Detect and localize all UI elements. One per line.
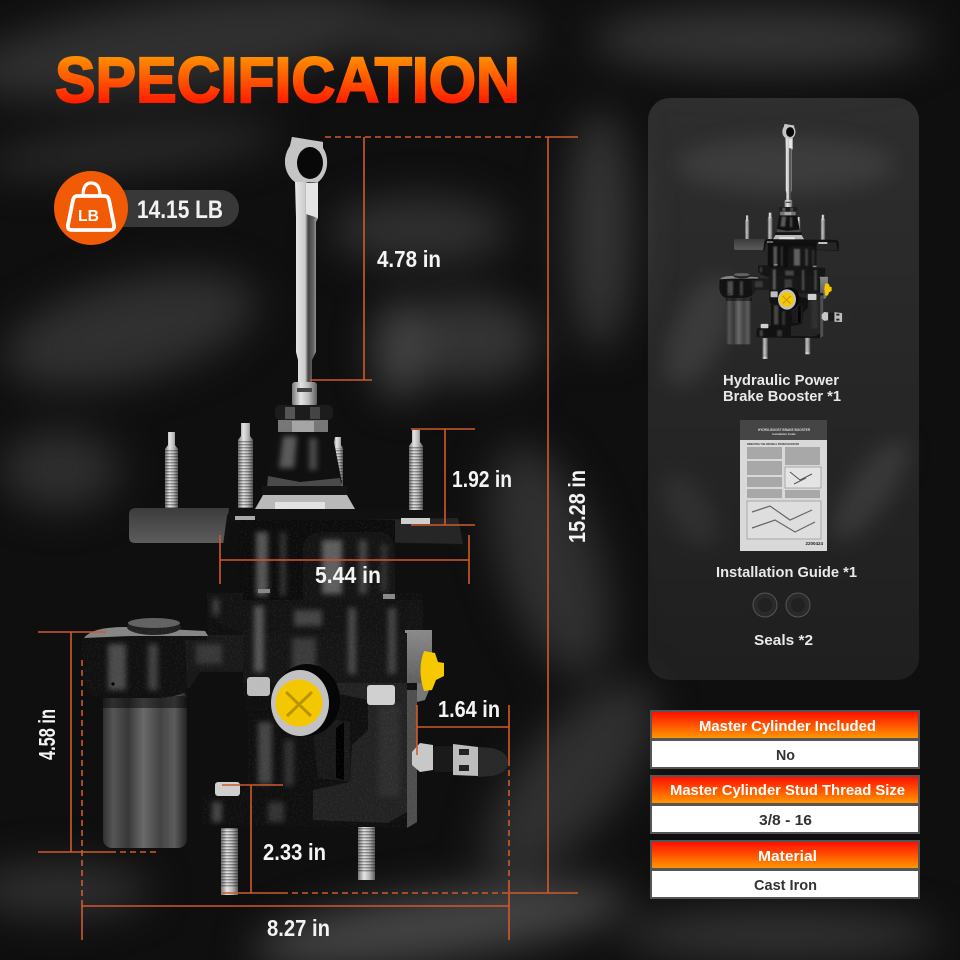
installation guide sheet: 2200424 [805,541,823,546]
dimension lines [38,137,578,940]
spec table: stud thread size [650,775,920,834]
dimension: stud height: 1.92 in [452,466,512,492]
spec table: material: Cast Iron [754,877,817,894]
spec table: stud thread size: 3/8 - 16 [759,812,812,829]
icon: weight: LB [78,208,99,225]
weight value: 14.15 LB [137,196,223,224]
installation guide sheet: REMOVING THE ORIGINAL POWER BOOSTER [747,442,799,446]
dimension: lower stud: 2.33 in [263,839,326,865]
label: seals: Seals *2 [754,632,813,649]
installation guide sheet [740,420,827,551]
weight badge [54,171,239,245]
dimension: overall height: 15.28 in [564,470,590,543]
dimension: plate width: 5.44 in [315,562,381,588]
dimension: reservoir height: 4.58 in [34,709,60,760]
dimension: rod length: 4.78 in [377,246,441,272]
spec table: master cylinder included: No [776,747,795,764]
product thumbnail [719,124,851,359]
label: installation guide: Installation Guide *1 [716,564,857,581]
icon: weight [68,183,114,230]
spec table: master cylinder included: Master Cylinder Included [699,718,876,735]
spec table: stud thread size: Master Cylinder Stud Thread Size [670,782,905,799]
label: hydraulic power brake booster: Hydraulic Power [723,372,839,389]
installation guide sheet: HYDRO-BOOST BRAKE BOOSTER [758,428,811,432]
seals [753,593,810,617]
label: hydraulic power brake booster [723,372,841,405]
title: SPECIFICATION [55,45,520,116]
spec table: material [650,840,920,899]
spec table: material: Material [758,848,817,865]
spec table: master cylinder included [650,710,920,769]
dimension: overall width: 8.27 in [267,915,330,941]
dimension: fitting length: 1.64 in [438,696,500,722]
label: hydraulic power brake booster: Brake Booster *1 [723,388,841,405]
product: hydraulic brake booster [80,137,508,895]
installation guide sheet: Installation Guide [772,432,796,436]
panel: package contents [648,98,921,680]
